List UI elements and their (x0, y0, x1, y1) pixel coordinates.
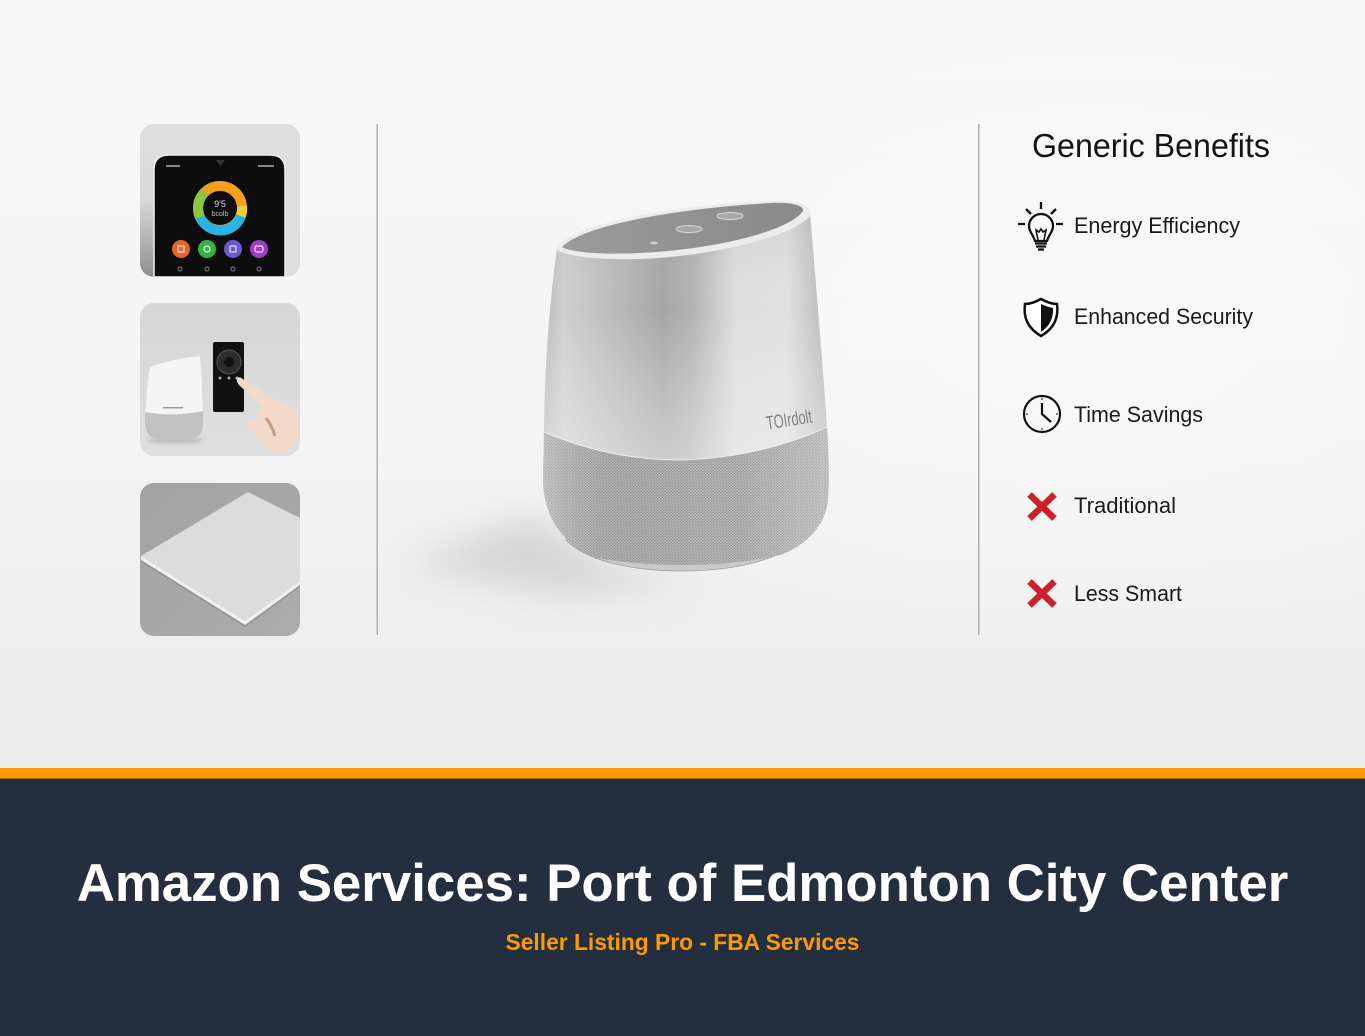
icon: light bulb (1018, 202, 1063, 250)
benefit: enhanced security (1025, 299, 1253, 336)
drawback: traditional: Traditional (1074, 493, 1176, 518)
chart: donut ring (198, 186, 242, 231)
drawback: traditional (1030, 493, 1176, 518)
icon: clock (1024, 396, 1060, 432)
benefit: energy efficiency (1018, 202, 1240, 250)
thumbnail: remote and speaker (140, 303, 300, 456)
benefit: time savings: Time Savings (1074, 402, 1203, 427)
speaker base rim (566, 540, 798, 571)
thumbnail: smartphone app (140, 124, 300, 277)
divider: right (978, 124, 980, 635)
speaker fabric grille (543, 427, 829, 565)
benefit: energy efficiency: Energy Efficiency (1074, 213, 1240, 238)
subtitle: Seller Listing Pro - FBA Services (506, 929, 859, 955)
speaker brand label: TOIrdolt (765, 407, 814, 435)
thumbnail: smartphone app: 9'5 (214, 199, 226, 209)
icon: shield (1025, 299, 1057, 336)
orange accent stripe (0, 768, 1365, 778)
thumbnail: flat panel (140, 483, 300, 636)
benefit: enhanced security: Enhanced Security (1074, 304, 1253, 329)
benefit: time savings (1024, 396, 1203, 432)
drawback: less smart: Less Smart (1074, 581, 1182, 606)
icon: red cross (1030, 494, 1054, 518)
panel: generic benefits (1018, 127, 1270, 606)
speaker metal body (544, 213, 827, 460)
drawback: less smart (1030, 581, 1182, 606)
title: Amazon Services: Port of Edmonton City Center (77, 854, 1288, 913)
heading: Generic Benefits (1032, 127, 1270, 164)
speaker top surface (556, 201, 811, 259)
background (0, 0, 1365, 768)
product: smart speaker (405, 201, 829, 595)
app icons row (172, 240, 268, 271)
divider: left (376, 124, 378, 635)
thumbnail: smartphone app: bcolb (212, 211, 228, 218)
icon: red cross (1030, 582, 1054, 606)
speaker shadow (405, 515, 700, 595)
footer background (0, 778, 1365, 1036)
panel: left thumbnails (140, 124, 300, 636)
hand pointing (237, 377, 298, 455)
